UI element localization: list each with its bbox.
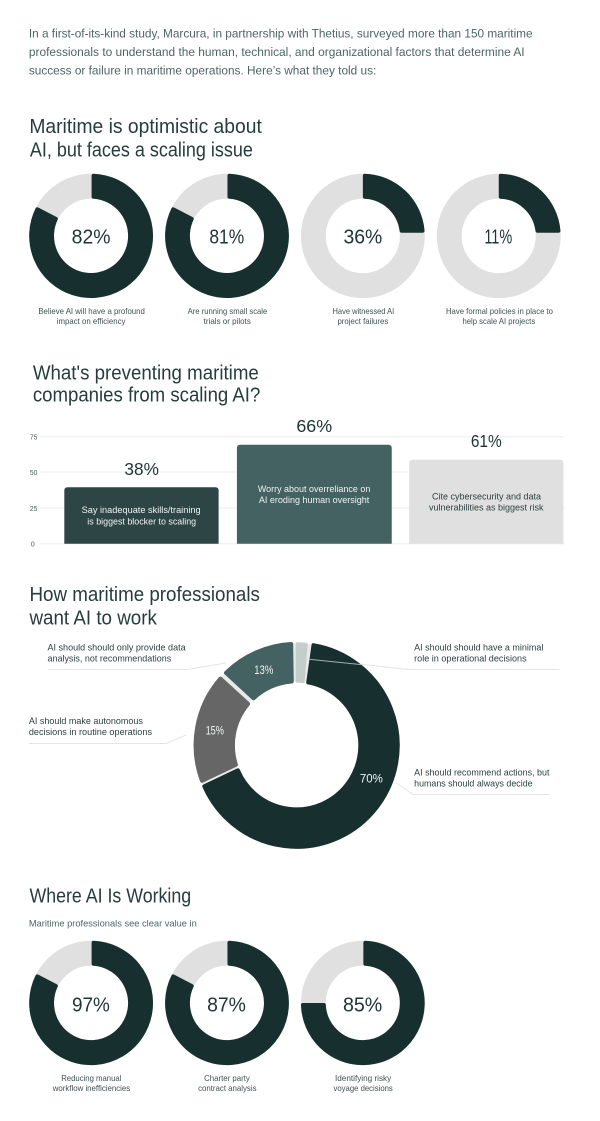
caption: workflow — [52, 1074, 130, 1093]
label: autonomous: decisions in routine operations — [29, 727, 153, 737]
caption: trials: trials or pilots — [204, 317, 251, 326]
segment: minimal role — [297, 644, 306, 682]
bar: cybersecurity 61 percent — [409, 431, 563, 544]
caption: failures: project failures — [337, 317, 388, 326]
axis labels: 50 — [30, 470, 37, 477]
label: autonomous — [29, 716, 153, 737]
value: 70 percent: 70% — [360, 771, 383, 785]
bar: overreliance 66 percent: AI eroding human oversight — [259, 495, 370, 505]
label: data analysis only — [47, 642, 186, 664]
bar: skills 38 percent: Say inadequate skills/training — [82, 505, 201, 515]
donut: 11 percent — [449, 176, 558, 286]
panel: blockers to scaling — [30, 362, 564, 549]
segment: recommend 70 percent — [204, 645, 398, 847]
caption: charter party: Charter party — [204, 1074, 250, 1083]
heading: how AI should work: How maritime professionals — [29, 584, 260, 606]
heading: blockers: What's preventing maritime — [33, 362, 259, 384]
caption: trials — [188, 307, 268, 326]
subheading: Maritime professionals see clear value in — [29, 918, 197, 929]
donut: 36 percent: 36% — [343, 226, 383, 248]
bar: cybersecurity 61 percent: vulnerabilities as biggest risk — [429, 502, 544, 512]
bar: skills 38 percent — [64, 459, 219, 544]
bar: cybersecurity 61 percent: Cite cybersecurity and data — [432, 491, 542, 501]
segment: data only 13 percent — [226, 644, 292, 698]
caption: trials: Are running small scale — [188, 307, 268, 316]
label: minimal role: role in operational decisions — [414, 654, 527, 664]
donut: 81 percent — [167, 176, 287, 296]
axis labels: 75 — [30, 434, 37, 442]
label: data analysis only: analysis, not recommendations — [47, 654, 172, 664]
label: recommend actions: AI should recommend actions, but — [414, 767, 550, 777]
caption: policies — [446, 307, 554, 326]
bar: overreliance 66 percent: 66% — [296, 416, 332, 436]
heading: blockers — [33, 362, 260, 407]
donut: 82 percent: 82% — [72, 226, 111, 248]
heading: optimism: Maritime is optimistic about — [29, 116, 262, 138]
bar: cybersecurity 61 percent: 61% — [471, 431, 502, 451]
bar: overreliance 66 percent — [237, 416, 392, 544]
donut: 97 percent: 97% — [72, 994, 110, 1016]
label: minimal role: AI should should have a minimal — [414, 642, 543, 652]
label: recommend actions: humans should always decide — [414, 778, 533, 788]
intro text — [29, 26, 533, 78]
heading: where AI is working: Where AI Is Working — [29, 885, 191, 907]
panel: where AI is working — [29, 885, 423, 1093]
caption: efficiency: Believe AI will have a profound — [38, 307, 145, 316]
label: autonomous: AI should make autonomous — [29, 716, 143, 726]
heading: blockers: companies from scaling AI? — [33, 385, 260, 407]
caption: policies: help scale AI projects — [463, 317, 535, 326]
donut: 82 percent — [31, 176, 151, 296]
intro text: professionals to understand the human, technical, and organizational factors that determine AI — [29, 45, 525, 59]
value: 15 percent: 15% — [206, 723, 224, 737]
bar: skills 38 percent: is biggest blocker to scaling — [87, 517, 196, 527]
panel: optimism about AI — [29, 116, 558, 326]
caption: workflow: workflow inefficiencies — [52, 1084, 130, 1093]
donut: 85 percent: 85% — [343, 994, 383, 1016]
caption: charter party: contract analysis — [198, 1084, 257, 1093]
caption: voyage decisions: voyage decisions — [333, 1084, 393, 1093]
caption: workflow: Reducing manual — [61, 1074, 122, 1083]
bar: overreliance 66 percent: Worry about overreliance on — [258, 484, 370, 494]
segment: autonomous 15 percent — [196, 679, 248, 781]
donut: 81 percent: 81% — [209, 226, 244, 248]
donut: 85 percent — [303, 943, 423, 1063]
label: minimal role — [414, 642, 543, 664]
bar: skills 38 percent: 38% — [124, 459, 159, 479]
caption: voyage decisions — [333, 1074, 393, 1093]
label: data analysis only: AI should should only provide data — [47, 642, 186, 652]
intro text: In a first-of-its-kind study, Marcura, in partnership with Thetius, surveyed more than 150 maritime — [29, 26, 533, 41]
donut: 36 percent — [313, 176, 423, 286]
axis labels — [30, 434, 37, 549]
donut: 87 percent — [167, 943, 287, 1063]
big donut chart — [196, 644, 398, 847]
bar chart — [30, 416, 564, 549]
caption: charter party — [198, 1074, 257, 1093]
caption: voyage decisions: Identifying risky — [335, 1074, 391, 1083]
caption: efficiency: impact on efficiency — [57, 317, 125, 326]
donut: 11 percent: 11% — [484, 226, 512, 248]
label: recommend actions — [414, 767, 550, 788]
caption: efficiency — [38, 307, 145, 326]
leader lines — [29, 663, 559, 794]
panel: how professionals want AI to work — [29, 584, 559, 847]
leader inside segment — [309, 659, 361, 665]
donut: 87 percent: 87% — [207, 994, 246, 1016]
donut: 97 percent — [31, 943, 151, 1063]
heading: optimism: AI, but faces a scaling issue — [30, 139, 253, 162]
value: 13 percent: 13% — [254, 663, 274, 677]
intro text: success or failure in maritime operations. Here’s what they told us: — [29, 63, 376, 78]
caption: policies: Have formal policies in place to — [446, 307, 554, 316]
axis labels: 0 — [31, 541, 35, 549]
caption: failures — [332, 307, 394, 326]
heading: how AI should work: want AI to work — [29, 607, 157, 629]
axis labels: 25 — [30, 506, 37, 513]
caption: failures: Have witnessed AI — [332, 307, 394, 316]
heading: how AI should work — [29, 584, 260, 629]
heading: optimism — [29, 116, 262, 162]
